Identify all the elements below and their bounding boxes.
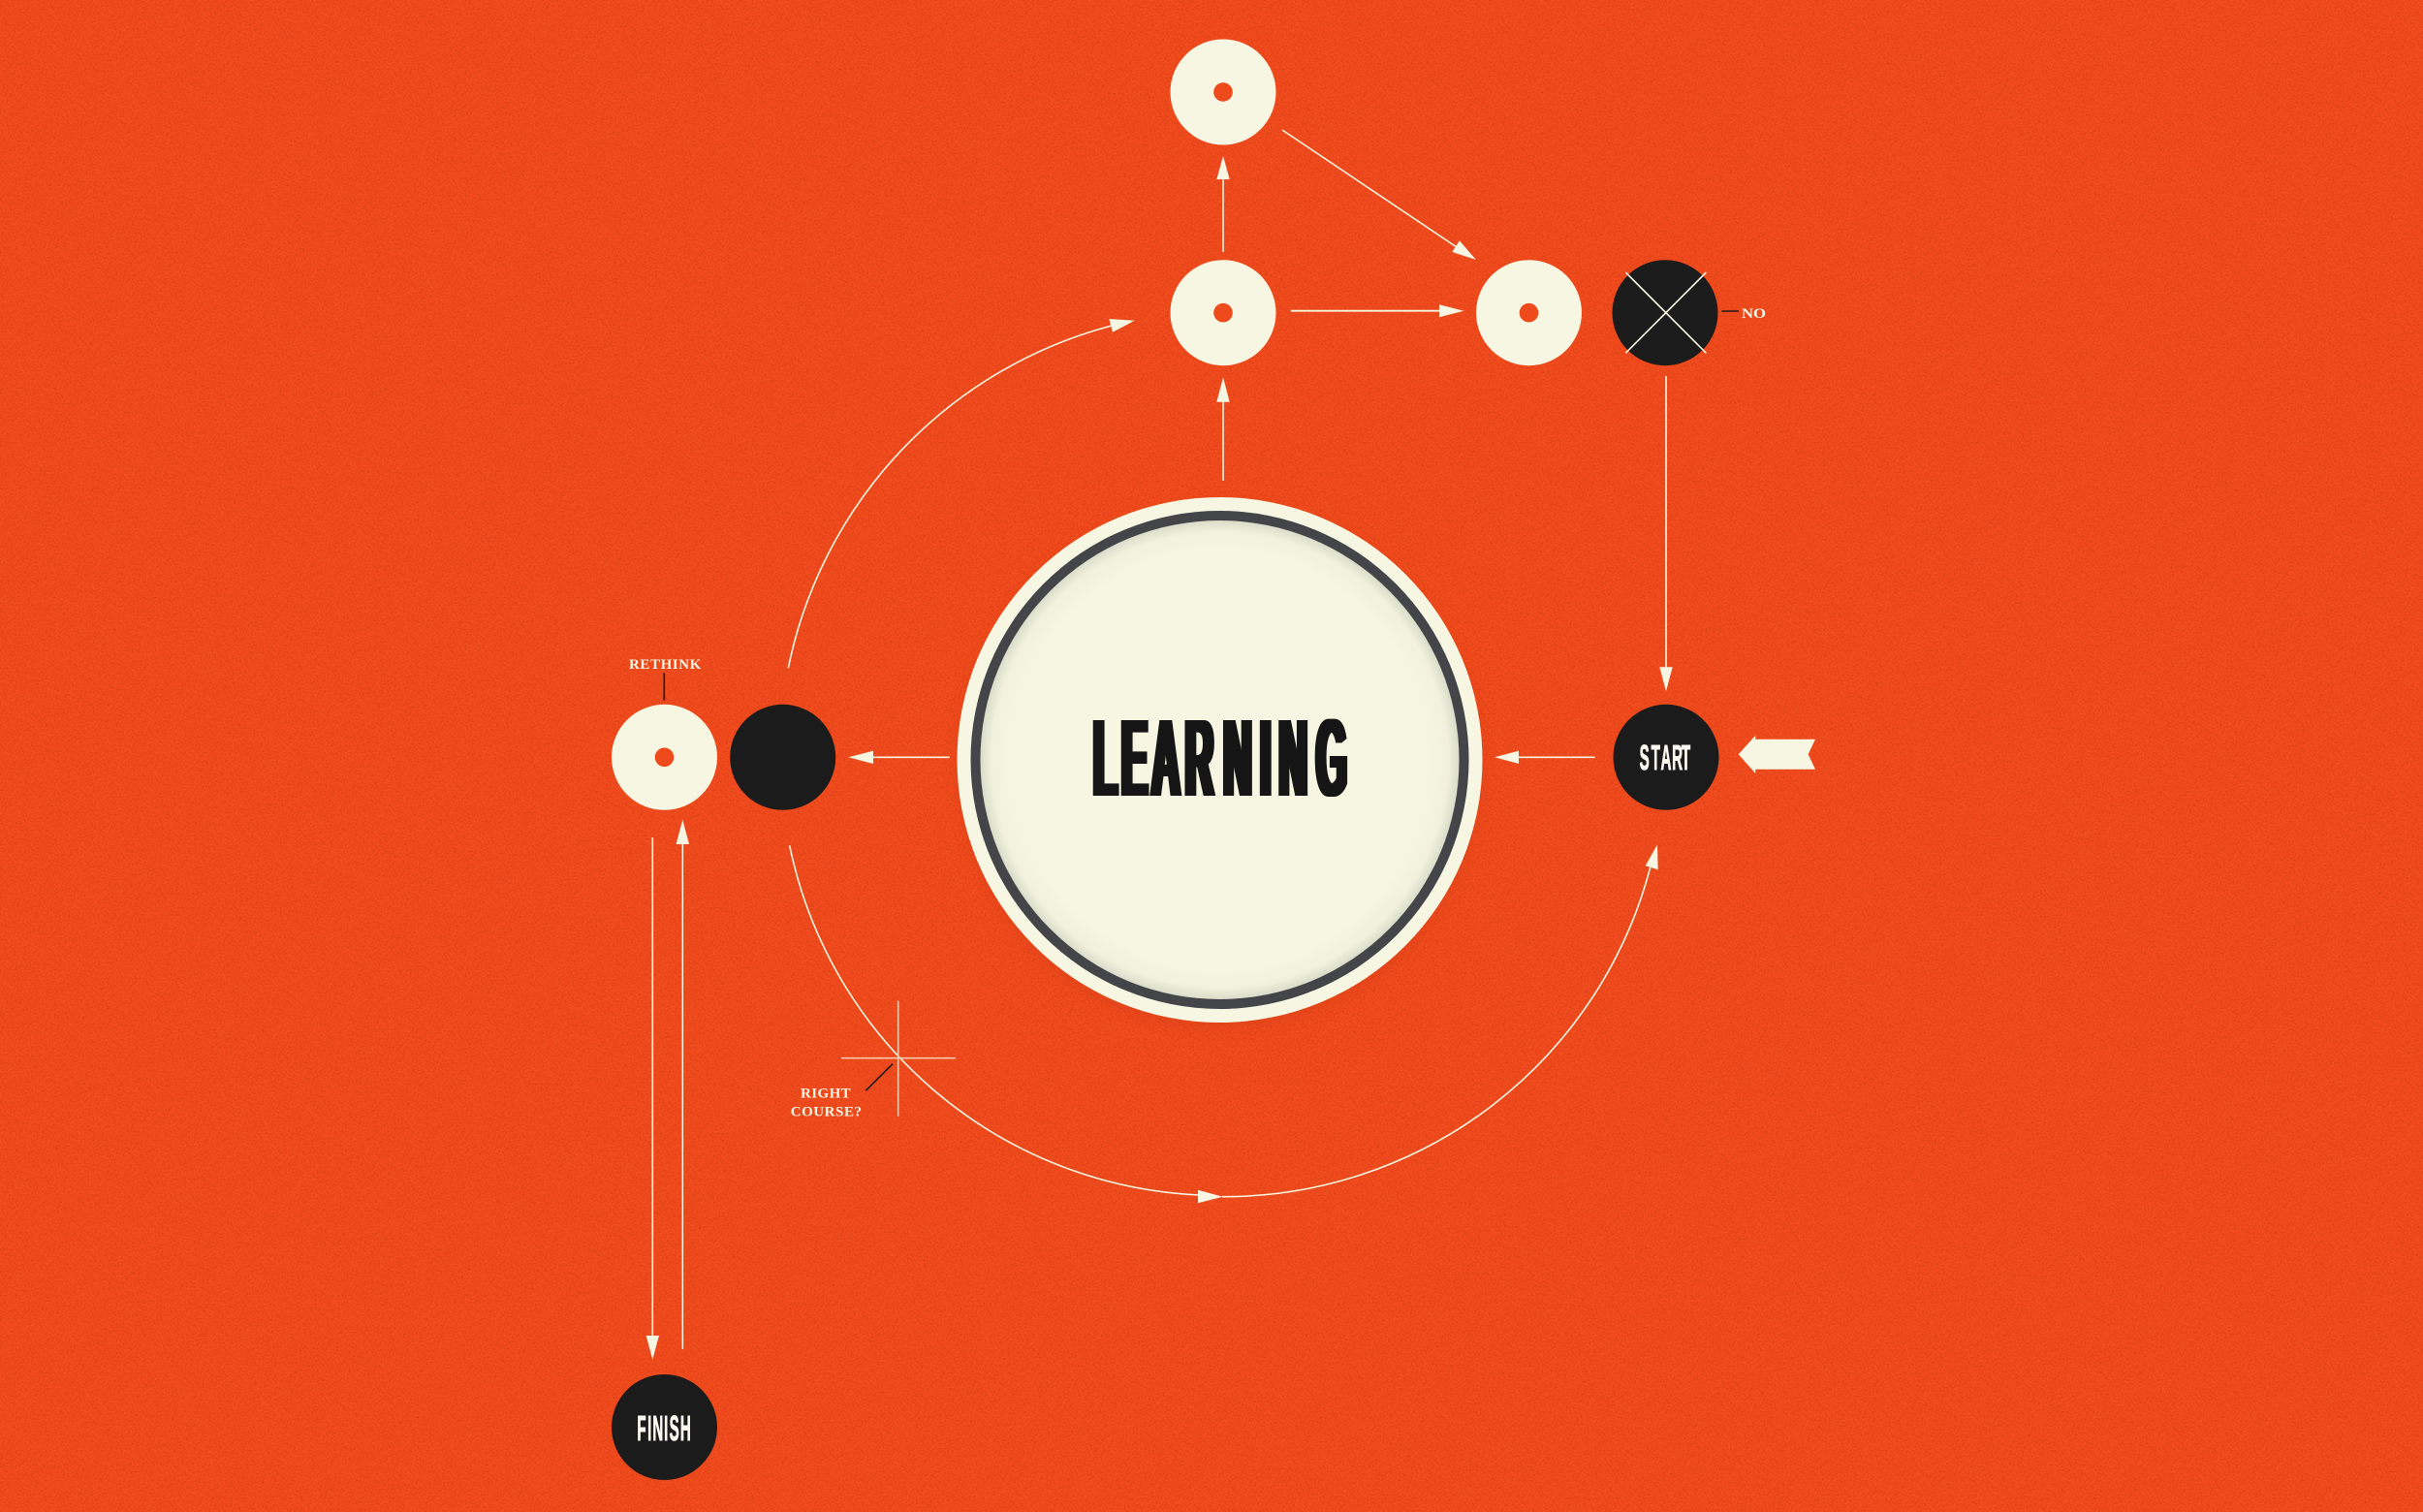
- arrow: crossed circle to start: [1659, 376, 1673, 691]
- label: RETHINK: RETHINK: [629, 657, 702, 673]
- arrow: curved lower arc to start: [1222, 844, 1658, 1197]
- marker: crosshair on curve: [841, 1001, 956, 1117]
- node: black circle: [730, 705, 835, 810]
- arrow: curved lower arc to bottom: [790, 845, 1223, 1203]
- label: NO: NO: [1742, 306, 1766, 322]
- node: START: START: [1640, 738, 1690, 777]
- node: right option: [1476, 260, 1582, 365]
- label: RIGHT COURSE?: COURSE?: [791, 1105, 862, 1120]
- node: FINISH: [612, 1374, 717, 1480]
- arrow: curved upper arc to middle node: [788, 319, 1135, 668]
- icon: start pointer arrow: [1739, 736, 1815, 773]
- arrow: rethink down to finish: [646, 837, 659, 1360]
- label: RIGHT COURSE?: RIGHT: [801, 1086, 851, 1101]
- node: crossed out black circle: [1613, 260, 1717, 365]
- arrow: center to middle: [1216, 377, 1230, 481]
- title: LEARNING: LEARNING: [1093, 697, 1347, 819]
- label: RIGHT COURSE?: [791, 1064, 893, 1120]
- arrow: top to right: [1282, 130, 1476, 260]
- arrow: start to center: [1495, 751, 1595, 764]
- node: middle option: [1171, 260, 1275, 365]
- arrow: middle to top: [1216, 156, 1230, 252]
- arrow: finish up to rethink: [677, 820, 689, 1349]
- arrow: middle to right: [1291, 304, 1463, 317]
- node: rethink cream circle: [612, 705, 717, 810]
- node: FINISH: FINISH: [637, 1409, 691, 1448]
- node: START: [1613, 705, 1719, 810]
- arrow: center to black circle: [848, 751, 950, 764]
- label: RETHINK: [629, 657, 702, 701]
- panel: central learning circle: [958, 497, 1483, 1027]
- label: NO: [1721, 306, 1766, 322]
- node: top option: [1171, 39, 1275, 145]
